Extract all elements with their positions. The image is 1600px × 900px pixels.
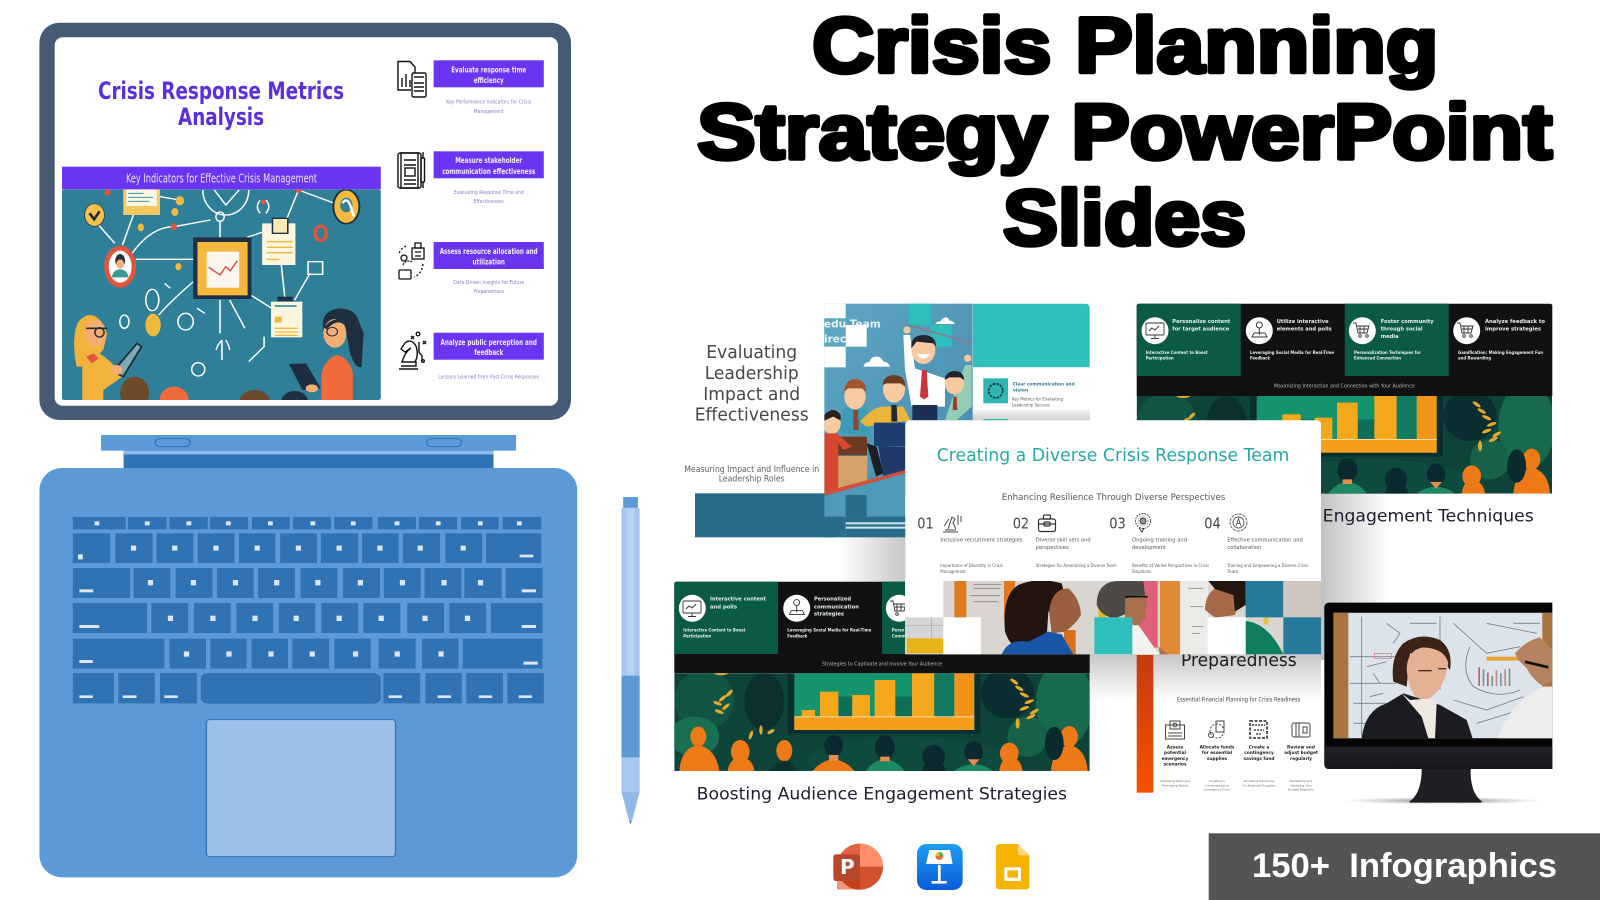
engagement column text: Foster community [1381, 319, 1434, 325]
engagement image: presentation audience [1132, 383, 1555, 506]
column 03: development [1132, 545, 1167, 551]
center card: diverse crisis response team [905, 420, 1321, 654]
slide: engagement techniques [1132, 304, 1555, 527]
tablet band: key indicators: Key Indicators for Effective Crisis Management [126, 171, 317, 185]
main title: Strategy PowerPoint [697, 88, 1552, 176]
engagement column text: through social [1381, 327, 1423, 333]
keys [73, 517, 544, 704]
boosting column text: strategies [814, 612, 845, 618]
monitor photo [1333, 613, 1552, 738]
teal header block [973, 304, 1090, 367]
column 01: Management [940, 569, 966, 574]
engagement column text: Gamification: Making Engagement Fun [1458, 350, 1543, 355]
step labels: adjust budget [1284, 750, 1318, 756]
boosting column text: Participation [683, 633, 711, 638]
engagement column text: Personalize content [1172, 319, 1231, 325]
metric 2: stakeholder communication: Measure stakeholder [455, 156, 523, 165]
tablet slide title [98, 77, 344, 131]
tablet device [39, 23, 571, 420]
step notes: Creating a [1209, 779, 1225, 783]
metric 1: evaluate response time: Key Performance Indicators for Crisis [446, 100, 532, 106]
metric 2: stakeholder communication: Evaluating Response Time and [454, 190, 524, 196]
step labels [1162, 744, 1318, 768]
metric 1: evaluate response time [398, 60, 544, 115]
engagement column text: Enhanced Connection [1354, 355, 1401, 360]
step labels: regularly [1290, 756, 1312, 762]
keyboard body [39, 468, 577, 877]
column 04: Effective communication and [1227, 537, 1303, 543]
step labels: Review and [1287, 744, 1315, 750]
badge: 150+ infographics [1209, 833, 1600, 900]
column 03: Ongoing training and [1132, 537, 1187, 543]
leadership subtitle: Leadership Roles [719, 473, 785, 483]
badge: 150+ infographics: 150+ Infographics [1252, 847, 1557, 885]
step notes: Emergency Fund [1204, 788, 1230, 792]
tablet slide title: Crisis Response Metrics [98, 77, 344, 105]
slide: boosting audience engagement [669, 582, 1093, 804]
column 04: Team [1226, 569, 1238, 574]
step labels: Assess [1167, 744, 1184, 750]
step notes: Prioritizing Needs [1162, 783, 1189, 787]
boosting image: presentation audience [669, 660, 1093, 783]
orange side bar [1137, 655, 1153, 793]
metric 4: public perception: Analyze public perception and [440, 338, 537, 347]
stylus pen [621, 497, 640, 824]
key glyphs [78, 521, 538, 698]
leadership heading: Leadership [705, 363, 799, 384]
fragment of hidden heading: edu Team [824, 318, 881, 330]
step labels: supplies [1207, 756, 1228, 762]
column 02 [1013, 514, 1117, 568]
engagement column text: Utilize interactive [1277, 319, 1329, 325]
column 01: Inclusive recruitment strategies [940, 537, 1023, 543]
leadership subtitle: Measuring Impact and Influence in [684, 464, 819, 474]
column 03: Benefits of Varied Perspectives in Crisis [1132, 563, 1209, 568]
leadership list item: Clear communication and [1013, 381, 1075, 387]
leadership subtitle [684, 464, 819, 483]
engagement strip text: Maximizing Interaction and Connection with Your Audience [1274, 384, 1415, 390]
leadership list item: Leadership Success [1012, 402, 1050, 408]
metric 4: public perception [399, 332, 544, 381]
monitor with presentation photo [1324, 603, 1552, 804]
boosting header columns [674, 582, 1090, 673]
column 04: Training and Empowering a Diverse Crisis [1226, 563, 1308, 568]
preparedness heading: Preparedness [1181, 651, 1297, 671]
step labels: emergency [1162, 756, 1189, 762]
step notes: for Essential Supplies [1243, 783, 1276, 787]
leadership heading [695, 342, 809, 426]
engagement column text: Feedback [1250, 355, 1270, 360]
engagement column text: media [1381, 334, 1399, 340]
card photo strip: team at whiteboard [905, 580, 1321, 654]
boosting column text: Comm [892, 633, 906, 638]
column 01: Importance of Diversity in Crisis [940, 563, 1003, 568]
boosting column text: Feedback [787, 633, 808, 638]
fragment of hidden heading [824, 318, 881, 346]
tablet slide title: Analysis [178, 103, 264, 131]
leadership color bar [695, 493, 835, 537]
step labels: potential [1164, 750, 1186, 756]
engagement header columns [1137, 304, 1552, 396]
engagement column text: and Rewarding [1458, 355, 1491, 360]
step labels: Create a [1249, 744, 1269, 750]
boosting caption: Boosting Audience Engagement Strategies [697, 784, 1067, 804]
leadership list item [983, 378, 1075, 427]
leadership illustration: team [823, 304, 973, 537]
column 03: Situations [1132, 569, 1151, 574]
engagement column text: Participation [1146, 355, 1174, 360]
metric 3: resource allocation: Assess resource allocation and [440, 247, 538, 256]
step notes: Budget Regularly [1288, 788, 1314, 792]
engagement column text: improve strategies [1485, 327, 1542, 333]
boosting column text: and polls [710, 604, 738, 610]
leadership heading: Evaluating [706, 342, 797, 363]
engagement column text: for target audience [1172, 327, 1230, 333]
column 01 [917, 514, 1023, 574]
column 02: perspectives [1036, 545, 1069, 551]
column 04: collaboration [1227, 545, 1262, 551]
engagement column text: Interactive Content to Boost [1146, 350, 1208, 355]
card subtitle: Enhancing Resilience Through Diverse Perspectives [1002, 493, 1226, 503]
engagement column text: Personalization Techniques for [1354, 350, 1421, 355]
icon: google slides [996, 844, 1029, 889]
leadership list item: vision [1013, 387, 1028, 393]
boosting column text [683, 597, 906, 638]
column 03 [1109, 514, 1209, 574]
column 02: 02 [1013, 514, 1029, 532]
step notes [1160, 779, 1314, 792]
metric 1: evaluate response time: efficiency [474, 76, 504, 85]
step icons [1166, 721, 1310, 739]
step notes: Adjusting Your [1290, 783, 1312, 787]
column 04 [1204, 514, 1308, 574]
column 02: Diverse skill sets and [1036, 537, 1091, 543]
keyboard dock [39, 435, 577, 877]
step notes: Allocating Resources [1243, 779, 1275, 783]
metric 1: evaluate response time: Evaluate response time [451, 66, 526, 74]
step labels: scenarios [1163, 762, 1187, 768]
slide: financial preparedness [1137, 651, 1318, 793]
slide: evaluating leadership impact [684, 304, 1090, 537]
app icons row [833, 844, 1029, 890]
metric 3: resource allocation [399, 242, 544, 295]
metric 4: public perception: Lessons Learned from Past Crisis Responses [438, 375, 540, 381]
hinge [101, 435, 516, 472]
metric 1: evaluate response time: Management [474, 109, 504, 115]
step notes: Reviewing and [1290, 779, 1312, 783]
column 02: Strategies for Assembling a Diverse Team [1036, 563, 1117, 568]
engagement column text: Leveraging Social Media for Real-Time [1250, 350, 1334, 355]
card title: Creating a Diverse Crisis Response Team [937, 446, 1289, 466]
metric 3: resource allocation: Data-Driven Insights for Future [453, 280, 524, 286]
engagement caption: Engagement Techniques [1323, 507, 1534, 527]
tablet band: key indicators [62, 167, 381, 189]
trackpad [206, 720, 396, 857]
leadership heading: Impact and [703, 384, 800, 405]
step labels: savings fund [1244, 756, 1274, 762]
boosting column text: Interactive content [710, 597, 766, 603]
column 03: 03 [1109, 514, 1126, 532]
boosting column text: communication [814, 604, 859, 610]
engagement column text: elements and polls [1277, 327, 1332, 333]
step labels: for essential [1202, 750, 1233, 756]
boosting column text: Perso [892, 628, 905, 633]
main title [697, 1, 1552, 262]
tablet illustration: crisis network [62, 187, 381, 413]
leadership heading: Effectiveness [695, 405, 809, 426]
step labels: Allocate funds [1200, 744, 1235, 750]
boosting column text: Leveraging Social Media for Real-Time [787, 628, 872, 633]
boosting column text: Interactive Content to Boost [683, 628, 745, 633]
fragment of hidden heading: irec [824, 334, 846, 346]
metric 2: stakeholder communication: communication effectiveness [442, 167, 535, 176]
metric 3: resource allocation: utilization [472, 258, 505, 266]
center card shadow [840, 410, 1389, 700]
boosting column text: Personalized [814, 597, 851, 603]
step notes: Comprehensive [1205, 783, 1229, 787]
main title: Slides [1003, 174, 1246, 262]
metric 2: stakeholder communication: Effectiveness [474, 199, 504, 205]
icon: powerpoint: P [840, 855, 855, 879]
engagement column text: Analyze feedback to [1485, 319, 1545, 325]
icon: keynote [917, 844, 963, 890]
column 04: 04 [1204, 514, 1221, 532]
icon: powerpoint [833, 844, 883, 890]
engagement column text [1146, 319, 1545, 360]
metric 2: stakeholder communication [398, 151, 544, 205]
boosting strip text: Strategies to Captivate and Involve Your Audience [822, 661, 943, 667]
metric 4: public perception: feedback [474, 348, 504, 357]
leadership list item: Key Metrics for Evaluating [1012, 396, 1063, 402]
main title: Crisis Planning [812, 1, 1438, 89]
column 01: 01 [917, 514, 934, 532]
step notes: Assessing Risks and [1160, 779, 1190, 783]
metric 3: resource allocation: Preparedness [473, 289, 504, 295]
preparedness subtitle: Essential Financial Planning for Crisis Readiness [1177, 697, 1300, 703]
step labels: contingency [1244, 750, 1274, 756]
